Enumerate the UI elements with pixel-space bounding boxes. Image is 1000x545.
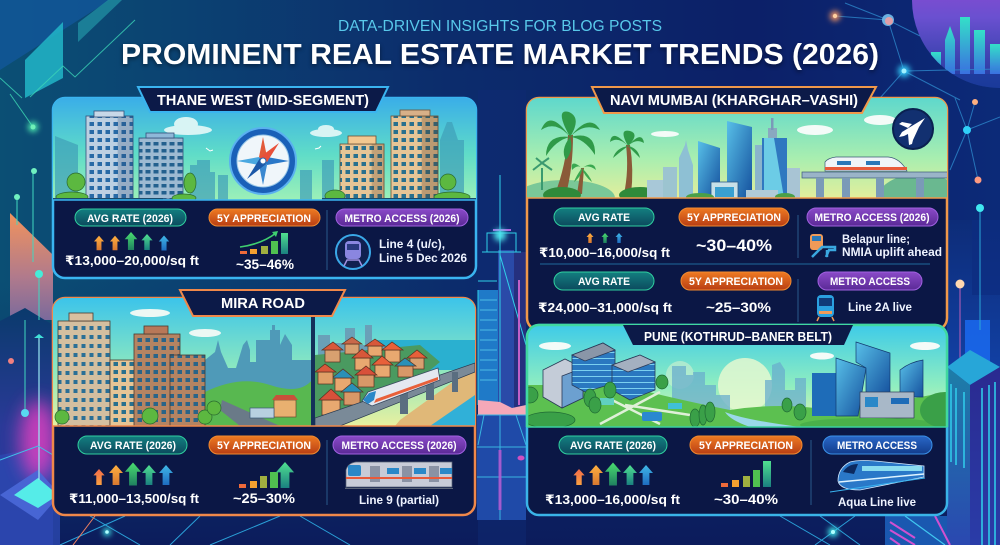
metric: 5Y appreciation: ~25–30% [706,299,772,315]
metric: avg rate: AVG RATE (2026) [90,440,176,452]
decorative network nodes [830,3,1000,180]
metric: metro access: METRO ACCESS [830,276,910,288]
distant skyline [205,325,312,392]
trees [55,401,221,424]
metric: metro access: NMIA uplift ahead [842,247,942,259]
metric: avg rate: ₹11,000–13,500/sq ft [69,491,200,506]
metric: metro access: Line 2A live [848,302,912,314]
metric: 5Y appreciation: ~25–30% [233,490,296,506]
tab: Navi Mumbai: NAVI MUMBAI (KHARGHAR–VASHI) [610,92,858,109]
subtitle: DATA-DRIVEN INSIGHTS FOR BLOG POSTS [338,18,662,35]
metric: 5Y appreciation: 5Y APPRECIATION [217,213,311,225]
illustration: Pune campus and glass towers [528,326,946,426]
office blocks [543,343,655,408]
icon: metro train badge [336,235,370,269]
houses [315,337,440,426]
illustration: Mira Road towers, houses and metro [53,298,475,426]
metric: 5Y appreciation: ~35–46% [236,256,295,272]
metric: metro access: Belapur line; [842,234,910,246]
elevated monorail [802,157,948,198]
metric: avg rate: AVG RATE [578,276,630,288]
tab: Pune [623,325,853,345]
metro train on viaduct [315,363,475,426]
row: second Navi Mumbai metrics [538,272,922,322]
metric: 5Y appreciation: ~30–40% [696,236,772,255]
metric: metro access: METRO ACCESS (2026) [814,212,930,224]
metric: 5Y appreciation: ~30–40% [714,491,779,507]
decorative central tower [477,90,526,545]
metric: metro access [807,208,942,259]
metric: avg rate: AVG RATE (2026) [570,440,656,452]
green ground and river [527,385,947,427]
illustration: Navi Mumbai palms, towers and monorail [527,98,947,198]
metric: 5Y appreciation [209,436,320,506]
residential towers [58,313,205,426]
metric: avg rate [69,436,200,506]
towers [647,118,800,201]
metric: metro access: METRO ACCESS (2026) [342,440,457,452]
metric: 5Y appreciation [690,436,802,507]
panel: Thane West [53,87,476,278]
metric: avg rate [538,272,673,315]
buildings: right pair [340,110,438,199]
decorative top-left shards and trend line [0,0,135,98]
green hills and road [205,380,312,426]
icon: compass [230,128,296,194]
metric: avg rate: AVG RATE (2026) [87,213,173,225]
metric: metro access: Aqua Line live [838,497,916,509]
illustration: Thane West skyline with compass [53,98,476,202]
metric: metro access: METRO ACCESS [837,440,917,452]
tab: Thane West: THANE WEST (MID-SEGMENT) [157,92,369,109]
metric: 5Y appreciation: 5Y APPRECIATION [687,212,781,224]
title: PROMINENT REAL ESTATE MARKET TRENDS (2026) [121,39,879,71]
tab: Mira Road: MIRA ROAD [221,295,305,312]
tab: Mira Road [180,290,345,316]
metric: metro access [333,436,466,507]
panel: Pune [522,325,970,515]
decorative left column: pink wedge, posts and glowing floor [0,94,60,545]
decorative right column: posts and isometric tower [947,99,1000,545]
palm trees [541,112,647,198]
decorative top-right orb with skyline [912,0,1000,88]
metric: avg rate [539,208,671,260]
metric: avg rate [545,436,681,507]
panel: Navi Mumbai [515,87,962,330]
metric: metro access: Line 9 (partial) [359,495,439,507]
trees [56,173,470,202]
metric: avg rate: ₹13,000–16,000/sq ft [545,492,681,507]
metric: avg rate: ₹10,000–16,000/sq ft [539,245,671,260]
metric: metro access: Line 4 (u/c), [379,239,445,251]
icon: metro on viaduct [810,234,835,257]
metric: metro access: METRO ACCESS (2026) [344,213,460,225]
panel: Mira Road [53,290,475,515]
metric: 5Y appreciation: 5Y APPRECIATION [699,440,793,452]
icon: airplane badge [893,109,933,149]
trees [522,375,806,428]
decorative bottom strip [60,516,950,545]
metric: 5Y appreciation [681,272,791,315]
coastal half [464,298,475,310]
metric: metro access [817,272,922,321]
metric: 5Y appreciation [679,208,789,255]
metric: avg rate: ₹13,000–20,000/sq ft [65,253,200,268]
metric: 5Y appreciation: 5Y APPRECIATION [689,276,783,288]
icon: metro train side view [345,462,453,489]
row: Navi Mumbai metrics [539,208,942,260]
metric: metro access: Line 5 Dec 2026 [379,253,467,265]
tab: Pune: PUNE (KOTHRUD–BANER BELT) [644,330,832,344]
tab: Thane West [138,87,388,112]
icon: aqua line bullet train [830,460,925,492]
metric: avg rate [65,209,200,268]
metric: metro access [336,209,468,269]
glass towers [800,342,946,426]
icon: metro front [817,295,834,321]
buildings: left pair [86,111,183,199]
metric: avg rate: ₹24,000–31,000/sq ft [538,300,673,315]
metric: metro access [823,436,932,509]
metric: 5Y appreciation [209,209,320,272]
metric: 5Y appreciation: 5Y APPRECIATION [217,440,311,452]
tab: Navi Mumbai [592,87,876,113]
metric: avg rate: AVG RATE [578,212,630,224]
